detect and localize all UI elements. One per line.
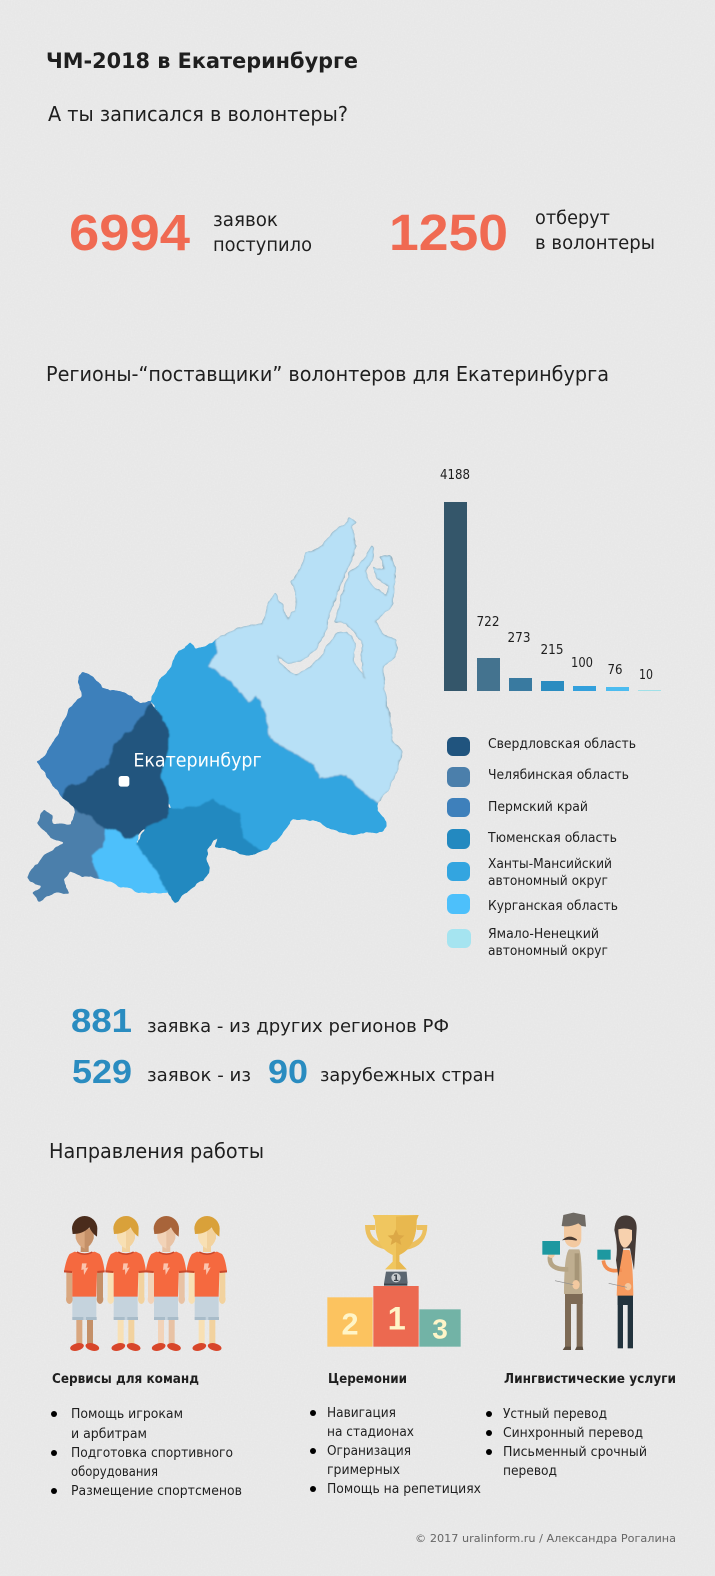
icon: two interpreters with books (542, 1213, 637, 1350)
stat: volunteers selected: в волонтеры (535, 232, 655, 254)
city marker (119, 776, 129, 787)
title: ЧМ-2018 в Екатеринбурге (46, 49, 358, 73)
icon: trophy and podium: 1 (393, 1274, 399, 1284)
column: language services: Синхронный перевод (503, 1426, 643, 1441)
icon: trophy and podium: 2 (341, 1308, 359, 1342)
stat: other regions (71, 1002, 449, 1039)
map regions (27, 517, 403, 903)
column: language services: Устный перевод (503, 1407, 607, 1422)
stat: volunteers selected: отберут (535, 207, 610, 229)
stat: volunteers selected (389, 204, 655, 261)
bar chart: 273 (508, 631, 530, 646)
region: Sverdlovsk (62, 703, 168, 838)
stat: other regions: заявка - из других регионов РФ (147, 1016, 449, 1037)
column: team services: оборудования (71, 1465, 158, 1480)
bar chart: 215 (540, 643, 564, 658)
column: team services: Сервисы для команд (52, 1372, 199, 1387)
bar chart: 76 (608, 663, 622, 678)
legend: автономный округ (488, 874, 608, 889)
stat: foreign countries: 529 (72, 1053, 132, 1090)
column: ceremonies (310, 1372, 481, 1497)
column: language services: Лингвистические услуги (504, 1372, 676, 1387)
column: team services: Подготовка спортивного (71, 1446, 233, 1461)
legend: Тюменская область (487, 831, 617, 846)
bar chart (440, 468, 661, 691)
column: ceremonies: Помощь на репетициях (327, 1482, 481, 1497)
stat: volunteers selected: 1250 (389, 204, 508, 261)
region: Yamalo-Nenets (208, 517, 403, 803)
map of Ural federal district (27, 517, 403, 903)
column: ceremonies: Навигация (327, 1406, 396, 1421)
column: language services: перевод (503, 1464, 557, 1479)
column: language services: Письменный срочный (503, 1445, 647, 1460)
column: ceremonies: гримерных (327, 1463, 400, 1478)
column: ceremonies: на стадионах (327, 1425, 414, 1440)
footer credit: © 2017 uralinform.ru / Александра Рогалина (415, 1532, 676, 1545)
legend: Челябинская область (488, 768, 629, 783)
legend (447, 737, 636, 959)
stat: foreign countries (72, 1053, 495, 1090)
column: ceremonies: Огранизация (327, 1444, 411, 1459)
legend: Пермский край (488, 800, 588, 815)
icon: trophy and podium (327, 1215, 461, 1347)
region: Perm (36, 671, 151, 797)
heading: regions: Регионы-“поставщики” волонтеров для Екатеринбурга (46, 362, 609, 386)
column: team services (51, 1372, 242, 1499)
stat: foreign countries: 90 (268, 1053, 308, 1090)
stat: foreign countries: заявок - из (147, 1065, 251, 1086)
bar chart: 100 (571, 656, 593, 671)
stat: applications received: 6994 (69, 204, 191, 261)
icon: team of four players (64, 1216, 227, 1352)
region: Chelyabinsk (27, 809, 105, 902)
stat: applications received: поступило (213, 234, 312, 256)
city label: Екатеринбург (133, 750, 262, 772)
subtitle: А ты записался в волонтеры? (48, 102, 348, 126)
icon: trophy and podium: 3 (432, 1314, 448, 1345)
legend: Ямало-Ненецкий (488, 927, 599, 942)
column: team services: Размещение спортсменов (71, 1484, 242, 1499)
bar chart: 10 (639, 668, 653, 683)
bar chart: 722 (476, 615, 500, 630)
stat: applications received (69, 204, 312, 261)
region: Khanty-Mansi (151, 641, 387, 852)
heading: directions: Направления работы (49, 1139, 264, 1163)
column: team services: и арбитрам (71, 1427, 147, 1442)
man (565, 1293, 571, 1348)
region: Kurgan (92, 828, 167, 893)
legend: Курганская область (488, 899, 618, 914)
region: Tyumen (137, 798, 263, 903)
woman (618, 1295, 623, 1348)
stat: applications received: заявок (213, 209, 278, 231)
stat: other regions: 881 (71, 1002, 132, 1039)
column: language services (486, 1372, 676, 1479)
column: team services: Помощь игрокам (71, 1407, 183, 1422)
legend: автономный округ (488, 944, 608, 959)
stat: foreign countries: зарубежных стран (320, 1065, 495, 1086)
icon: trophy and podium: 1 (388, 1299, 406, 1336)
legend: Свердловская область (488, 737, 636, 752)
legend: Ханты-Мансийский (488, 857, 612, 872)
bar chart: 4188 (440, 468, 470, 483)
column: ceremonies: Церемонии (328, 1372, 407, 1387)
